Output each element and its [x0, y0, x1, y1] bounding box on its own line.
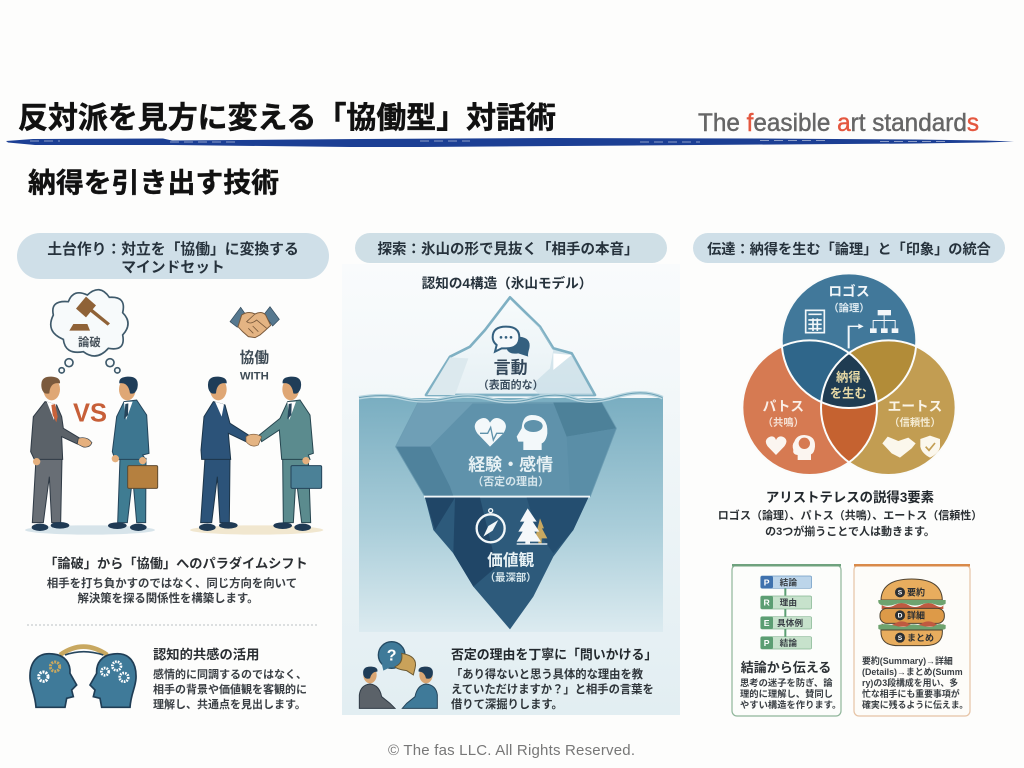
collaboration label [240, 350, 269, 382]
PREP flow diagram: P [764, 577, 770, 587]
card: SDS hamburger [854, 564, 970, 716]
text block: ask for reasons: 「あり得ないと思う具体的な理由を教 [451, 667, 644, 681]
person: navy suit [199, 377, 248, 531]
iceberg middle: experience and emotion [396, 403, 616, 496]
icon: hamburger diagram: S [898, 635, 903, 642]
water surface waves [359, 393, 663, 402]
section subtitle: 納得を引き出す技術 [28, 167, 279, 198]
text block: aristotle persuasion [718, 489, 982, 538]
icon: hamburger diagram: まとめ [907, 633, 934, 643]
panel heading pill: マインドセット [121, 259, 225, 276]
icon: pine trees [517, 508, 547, 545]
icon: speech bubbles [493, 327, 530, 357]
water [359, 398, 663, 632]
card body text: 忙な相手にも重要事項が [862, 688, 960, 699]
text block: ask for reasons [451, 647, 657, 711]
PREP flow diagram: 結論 [780, 637, 797, 648]
illustration: debate versus collaboration [25, 290, 323, 535]
icon: thought cloud with gavel [51, 290, 128, 373]
PREP flow diagram: 具体例 [777, 617, 803, 628]
card heading: 結論から伝える [741, 660, 831, 675]
icon: hamburger diagram: D [898, 613, 903, 620]
person: teal suit with brown briefcase [108, 377, 158, 531]
card body text: 要約(Summary)→詳細 [862, 655, 953, 666]
icon: hamburger diagram [878, 579, 946, 646]
venn diagram: three elements [743, 274, 955, 474]
text block: cognitive empathy [153, 646, 307, 711]
divider line across iceberg [424, 496, 590, 498]
ethos label: エートス [888, 399, 942, 414]
iceberg tip: behaviour [426, 297, 595, 395]
card body text: ry)の3段構成を用い、多 [862, 677, 958, 688]
card: conclusion first [732, 564, 841, 716]
text block: ask for reasons: えていただけますか？」と相手の言葉を [451, 682, 654, 696]
iceberg chart heading: 認知の4構造（氷山モデル） [422, 275, 592, 291]
card body text: やすい構造を作ります。 [740, 699, 841, 710]
icon: calculator [806, 310, 824, 333]
logos label: （論理） [828, 301, 870, 314]
panel heading pill: 探索：氷山の形で見抜く「相手の本音」 [378, 240, 638, 258]
person: green-teal suit with blue briefcase [246, 377, 322, 531]
icon: handshake [230, 307, 279, 338]
text block: aristotle persuasion: アリストテレスの説得3要素 [766, 489, 934, 505]
icon: heart with pulse [475, 418, 506, 447]
center label: 納得 [836, 370, 861, 385]
text block: paradigm shift: 解決策を探る関係性を構築します。 [77, 591, 259, 605]
card body text: 確実に残るように伝えま。 [862, 699, 968, 710]
iceberg tip label [478, 358, 544, 391]
VS label: VS [73, 397, 107, 427]
icon: compass [477, 509, 505, 542]
icon: two heads connected by a bridge [30, 647, 136, 707]
text block: aristotle persuasion: ロゴス（論理）、パトス（共鳴）、エートス（信頼性） [718, 508, 982, 522]
text block: aristotle persuasion: の3つが揃うことで人は動きます。 [765, 524, 935, 538]
bottom layer label: （最深部） [485, 571, 536, 584]
icon: head with brain [517, 415, 547, 450]
PREP flow diagram: R [764, 598, 771, 608]
panel heading pill: 土台作り：対立を「協働」に変換する [47, 240, 299, 258]
icon: two people asking questions: ? [387, 648, 397, 665]
card body text: (Details)→まとめ(Summ [862, 667, 963, 677]
icon: hamburger diagram: S [898, 590, 903, 597]
icon: hamburger diagram: 要約 [907, 587, 925, 598]
pathos label [763, 399, 804, 429]
PREP flow diagram: P [764, 638, 770, 648]
person: grey suit [31, 377, 92, 531]
iceberg bottom: values [425, 498, 588, 629]
text block: ask for reasons: 借りて深掘りします。 [451, 697, 563, 711]
icon: heart and smiling head [766, 435, 815, 460]
panel heading pill [17, 233, 329, 279]
iceberg diagram [359, 297, 663, 632]
brand tagline: The feasible art standards [698, 109, 979, 137]
panel heading pill [355, 233, 667, 263]
pathos label: （共鳴） [763, 416, 804, 429]
pathos label: パトス [763, 399, 804, 414]
panel: foundation mindset [17, 233, 329, 711]
page title: 反対派を見方に変える「協働型」対話術 [18, 102, 556, 135]
text block: cognitive empathy: 相手の背景や価値観を客観的に [153, 682, 307, 696]
panel heading pill [693, 233, 1005, 263]
iceberg tip label: 言動 [494, 358, 528, 377]
iceberg tip label: （表面的な） [478, 377, 544, 391]
ethos label [888, 399, 942, 429]
PREP flow diagram: E [764, 618, 770, 628]
icon: handshake and shield [882, 436, 940, 458]
icon: hamburger diagram: 詳細 [907, 610, 925, 621]
logos label: ロゴス [828, 283, 870, 299]
middle layer label: （否定の理由） [472, 474, 549, 488]
icon: two people asking questions [359, 642, 437, 708]
text block: cognitive empathy: 認知的共感の活用 [153, 646, 259, 662]
PREP flow diagram: 理由 [780, 597, 797, 608]
panel: delivery logic and impression [693, 233, 1005, 716]
icon: thought cloud with gavel: 論破 [78, 335, 101, 349]
panel: exploration iceberg [342, 233, 680, 715]
bottom layer label: 価値観 [487, 550, 534, 569]
middle layer label [468, 454, 553, 488]
center label [830, 370, 867, 401]
footer copyright: © The fas LLC. All Rights Reserved. [388, 742, 635, 759]
logos label [828, 283, 870, 314]
blue brush stroke divider [6, 138, 1014, 147]
card body text: 理的に理解し、賛同し [740, 688, 833, 699]
card body text [862, 655, 968, 710]
text block: ask for reasons: 否定の理由を丁寧に「問いかける」 [451, 647, 657, 662]
card body text [740, 677, 841, 710]
PREP flow diagram [761, 576, 812, 649]
bottom layer label [485, 550, 536, 584]
middle layer label: 経験・感情 [468, 454, 553, 474]
card body text: 思考の迷子を防ぎ、論 [740, 677, 833, 688]
icon: flow chart with arrow [848, 310, 898, 348]
collaboration label: 協働 [240, 350, 269, 367]
ground shadows [25, 525, 323, 535]
text block: paradigm shift: 相手を打ち負かすのではなく、同じ方向を向いて [47, 576, 297, 590]
ethos label: （信頼性） [889, 416, 941, 429]
text block: paradigm shift [44, 555, 308, 605]
PREP flow diagram: 結論 [780, 576, 797, 587]
center label: を生む [830, 386, 867, 401]
text block: cognitive empathy: 感情的に同調するのではなく、 [153, 667, 307, 681]
text block: paradigm shift: 「論破」から「協働」へのパラダイムシフト [44, 555, 308, 571]
collaboration label: WITH [240, 370, 269, 382]
text block: cognitive empathy: 理解し、共通点を見出します。 [153, 697, 306, 711]
panel heading pill: 伝達：納得を生む「論理」と「印象」の統合 [707, 241, 991, 258]
